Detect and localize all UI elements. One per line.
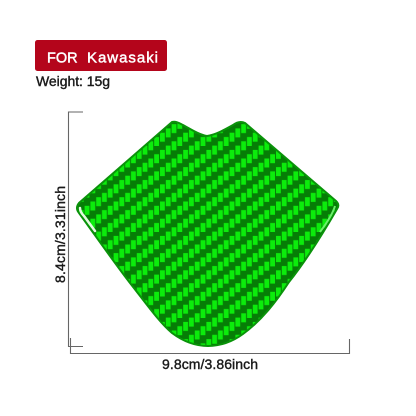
label: FOR Kawasaki: [35, 40, 167, 71]
height label: 8.4cm/3.31inch: [52, 186, 68, 283]
label: FOR Kawasaki: FOR: [47, 50, 78, 66]
width label: 9.8cm/3.86inch: [162, 356, 258, 372]
height dimension bracket: [68, 112, 83, 346]
label: FOR Kawasaki: Kawasaki: [87, 50, 158, 66]
weight text: Weight: 15g: [36, 73, 110, 89]
green carbon fibre panel: [77, 122, 338, 346]
width dimension bracket: [70, 338, 350, 354]
